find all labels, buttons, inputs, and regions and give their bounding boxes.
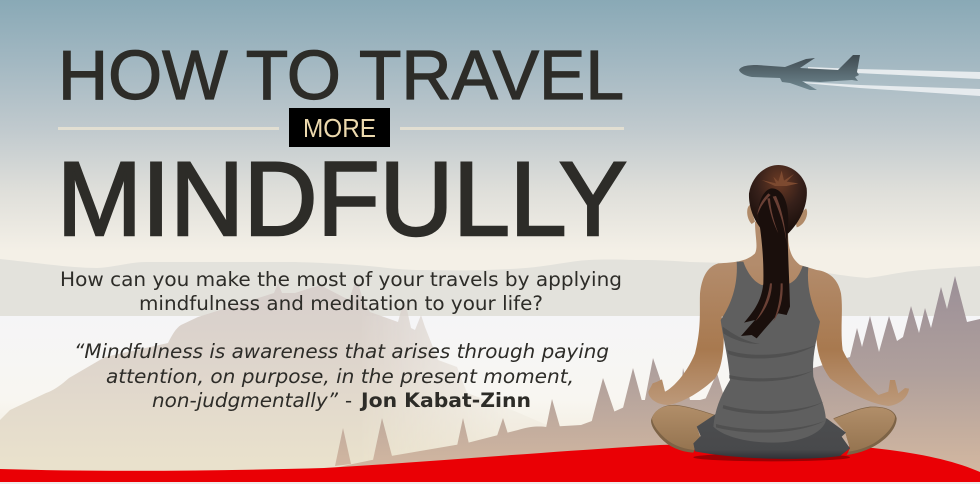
title divider with more badge xyxy=(58,108,624,147)
airplane with contrails xyxy=(739,55,980,96)
intro question text xyxy=(60,268,622,315)
foreground ridge with trees xyxy=(324,276,980,484)
tank top xyxy=(713,262,826,443)
sky background xyxy=(0,0,980,252)
legs xyxy=(651,405,897,455)
quote by Jon Kabat-Zinn: - xyxy=(345,389,352,412)
quote by Jon Kabat-Zinn: non-judgmentally” xyxy=(152,389,339,412)
seat shadow xyxy=(693,453,850,461)
intro question text: mindfulness and meditation to your life? xyxy=(139,292,543,315)
shorts xyxy=(693,413,850,459)
red ground xyxy=(0,444,980,484)
pale mountain xyxy=(0,283,502,470)
quote by Jon Kabat-Zinn xyxy=(74,340,609,412)
ears xyxy=(747,205,807,227)
title divider with more badge: MORE xyxy=(303,113,376,143)
ponytail xyxy=(741,188,790,338)
torso and arms xyxy=(648,222,909,406)
title: mindfully: MINDFULLY xyxy=(57,141,627,258)
intro question text: How can you make the most of your travels by applying xyxy=(60,268,622,291)
quote by Jon Kabat-Zinn: Jon Kabat-Zinn xyxy=(359,389,531,412)
meditating woman xyxy=(648,165,909,461)
distant hills band xyxy=(0,250,980,320)
hair cap xyxy=(749,165,807,233)
lake and lower ground xyxy=(0,316,980,484)
quote by Jon Kabat-Zinn: “Mindfulness is awareness that arises through paying xyxy=(74,340,609,363)
quote by Jon Kabat-Zinn: attention, on purpose, in the present moment, xyxy=(106,365,574,388)
title: how to travel: HOW TO TRAVEL xyxy=(58,36,624,114)
